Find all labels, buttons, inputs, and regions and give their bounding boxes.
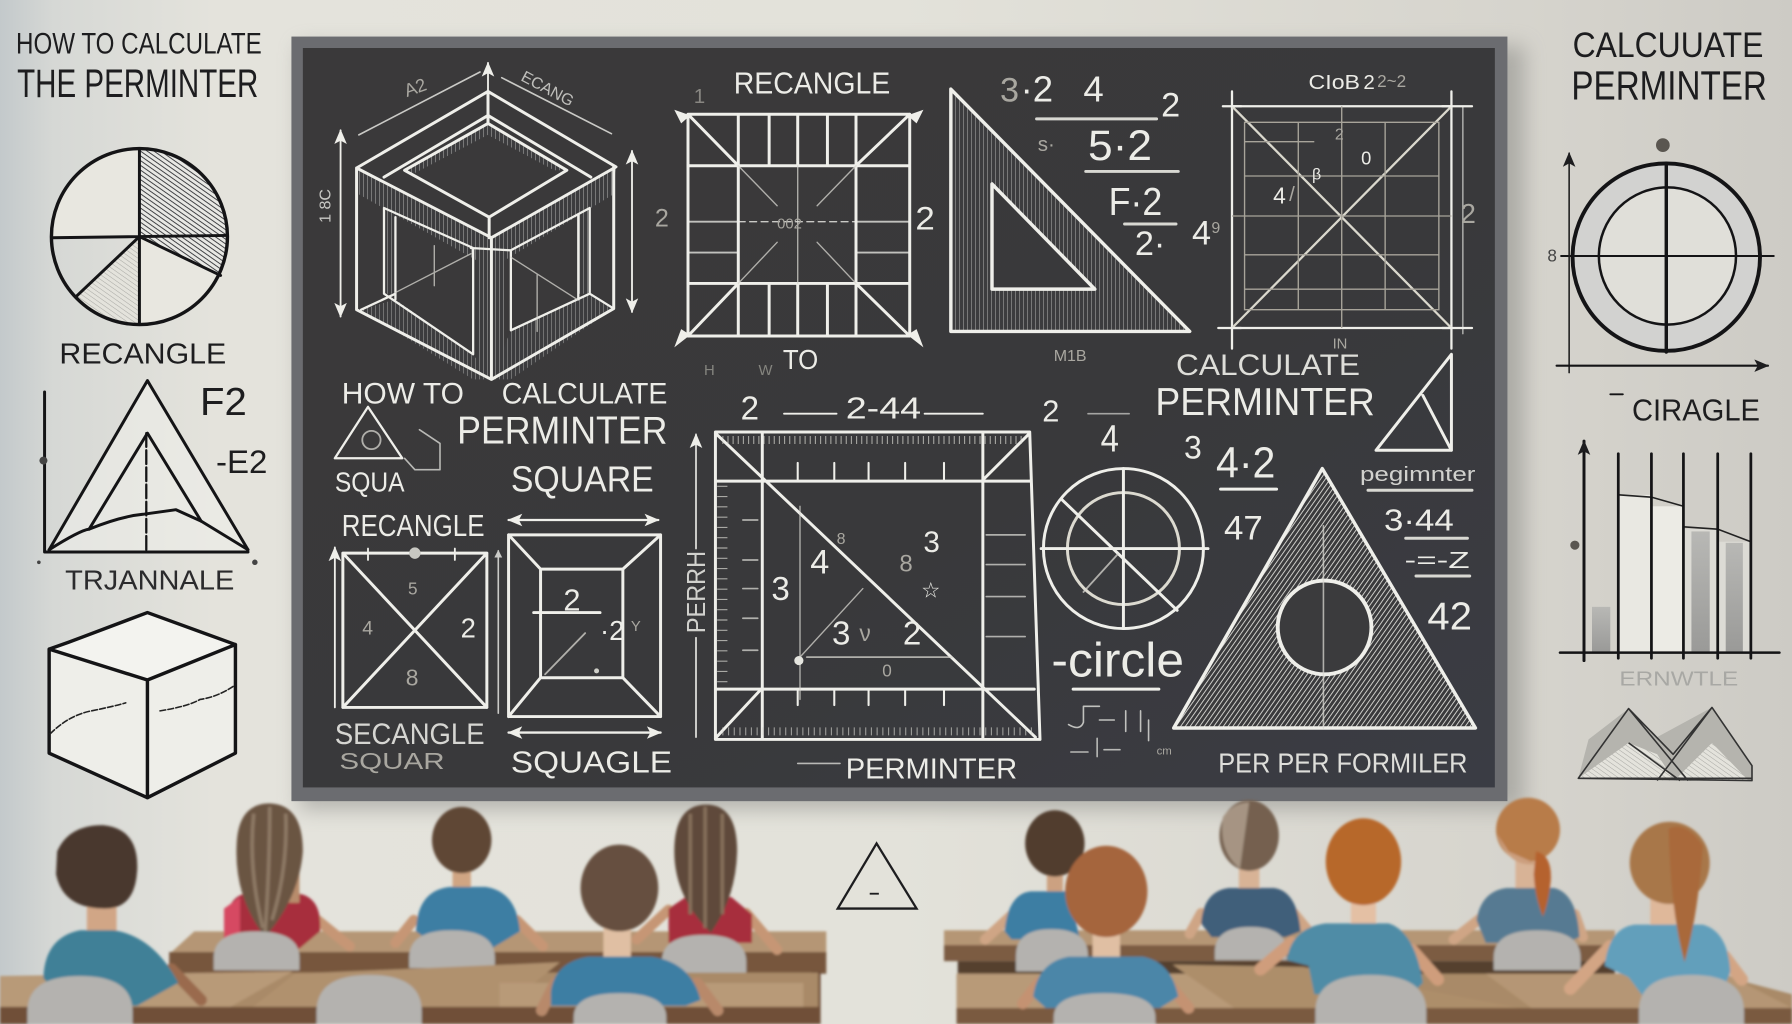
diagram: rectangle with grid: 1 bbox=[694, 85, 705, 108]
dimension numbers above rectangle: 4 bbox=[1101, 417, 1119, 459]
diagram: large ruled rectangle: 3 bbox=[923, 526, 940, 559]
chalk text: calculate perimeter left bbox=[342, 377, 667, 452]
diagram: square with diagonals: 2~2 bbox=[1377, 71, 1406, 91]
formula stack: fractions: 4 bbox=[1083, 69, 1104, 110]
student: grey-brown hair bbox=[1190, 800, 1309, 960]
dimension numbers above rectangle: 2-44 bbox=[846, 390, 921, 425]
diagram: hatched triangle with circle bbox=[1174, 469, 1475, 728]
dimension numbers above rectangle bbox=[741, 390, 1129, 459]
circle diagram on axes bbox=[1547, 138, 1774, 373]
chalk labels: bottom: PERMINTER bbox=[846, 753, 1017, 785]
chalkboard shadow bbox=[299, 46, 1525, 809]
bar chart bbox=[1560, 441, 1779, 661]
triangle sketch bbox=[37, 381, 267, 565]
student: dark hair teal shirt bbox=[27, 825, 201, 1024]
formula: perimeter stack bbox=[1360, 463, 1476, 639]
diagram: rectangle with grid bbox=[655, 66, 935, 347]
formula stack: fractions: F·2 bbox=[1109, 181, 1162, 224]
chalk text: calculate perimeter left: PERMINTER bbox=[457, 409, 667, 452]
chalk text: calculate perimeter left: HOW TO bbox=[342, 377, 464, 410]
triangle sketch: -E2 bbox=[216, 444, 267, 480]
formula: 4·2 over 47 bbox=[1184, 429, 1277, 547]
title: how to calculate the perimeter: THE PERMINTER bbox=[17, 62, 258, 106]
student: dark hair seated back bbox=[985, 810, 1088, 971]
formula: 4·2 over 47: 47 bbox=[1224, 509, 1263, 547]
diagram: crossed rectangle: 5 bbox=[408, 578, 418, 598]
diagram: large ruled rectangle: 3 bbox=[771, 571, 790, 608]
chalk text: how to: TO bbox=[783, 344, 818, 375]
diagram: nested square bbox=[509, 535, 661, 717]
chalk labels: secangle, squar, squagle bbox=[335, 718, 672, 780]
dimension numbers above rectangle: 2 bbox=[741, 390, 759, 427]
diagram: large ruled rectangle bbox=[681, 432, 1040, 739]
diagram: square with diagonals: β bbox=[1312, 166, 1321, 183]
diagram: nested square: 2 bbox=[563, 582, 581, 617]
formula stack: fractions: 4 bbox=[1192, 215, 1211, 253]
chalk labels: secangle, squar, squagle: SQUAR bbox=[339, 748, 445, 774]
triangle sketch: F2 bbox=[200, 381, 247, 424]
diagram: large ruled rectangle: 4 bbox=[810, 544, 829, 582]
diagram: square with diagonals: 2 bbox=[1461, 198, 1476, 229]
chalk text: how to: M1B bbox=[1054, 348, 1087, 365]
formula stack: fractions: 3 bbox=[1000, 72, 1019, 110]
diagram: nested square: Y bbox=[631, 619, 641, 635]
diagram: square with diagonals: 2 bbox=[1335, 126, 1344, 143]
chalk text: how to: H W bbox=[704, 363, 773, 379]
small triangle bbox=[1376, 354, 1451, 450]
formula stack: fractions bbox=[1000, 69, 1220, 263]
chalk text: calculate perimeter left: CALCULATE bbox=[502, 377, 667, 410]
panel: chalkboard bbox=[291, 37, 1507, 801]
diagram: rectangle with grid: 002 bbox=[777, 217, 802, 233]
chalk labels: secangle, squar, squagle: SQUAGLE bbox=[511, 745, 672, 780]
student: long hair red shirt right bbox=[637, 805, 777, 978]
title: how to calculate the perimeter: HOW TO CALCULATE bbox=[16, 28, 262, 61]
label: circle: -circle bbox=[1051, 635, 1184, 688]
icon: small triangle with tag bbox=[335, 407, 440, 470]
chalk labels: squa, square, recangle bbox=[335, 458, 654, 543]
chalk labels: squa, square, recangle: SQUA bbox=[335, 466, 405, 497]
front desks right group bbox=[957, 965, 1792, 1024]
formula stack: fractions: 5·2 bbox=[1088, 122, 1152, 169]
circle diagram on axes: 8 bbox=[1547, 246, 1557, 266]
scribbled formula bbox=[1069, 706, 1172, 757]
dimension arrows bbox=[317, 63, 632, 317]
student: center blue shirt bbox=[395, 807, 543, 968]
diagram: large ruled rectangle: 2 bbox=[903, 616, 921, 653]
diagram: square with diagonals bbox=[1218, 71, 1476, 353]
diagram: large ruled rectangle: 8 bbox=[899, 550, 913, 577]
classroom: right group of students bbox=[944, 798, 1792, 1024]
small triangle on wall bbox=[838, 843, 917, 909]
formula stack: fractions: 9 bbox=[1211, 220, 1220, 237]
hatched prisms sketch bbox=[1578, 707, 1752, 781]
student: orange hair bbox=[1261, 818, 1438, 1024]
formula stack: fractions: s· bbox=[1038, 133, 1055, 156]
formula stack: fractions: ·2 bbox=[1021, 69, 1053, 110]
diagram: square with diagonals: IN bbox=[1333, 337, 1347, 353]
diagram: square with diagonals: CIoB bbox=[1309, 71, 1360, 94]
diagram: crossed rectangle: 8 bbox=[406, 665, 418, 691]
diagram: set square triangle bbox=[951, 89, 1190, 331]
diagram: rectangle with grid: RECANGLE bbox=[734, 66, 890, 101]
diagram: large ruled rectangle: 0 bbox=[882, 661, 892, 681]
diagram: square with diagonals: 0 bbox=[1361, 148, 1371, 169]
label: ciragle: CIRAGLE bbox=[1632, 393, 1760, 428]
diagram: crossed rectangle bbox=[335, 547, 498, 713]
diagram: large ruled rectangle: PERRH bbox=[681, 551, 711, 633]
diagram: rectangle with grid: 2 bbox=[915, 201, 935, 237]
formula: 4·2 over 47: 3 bbox=[1184, 429, 1202, 465]
diagram: isometric cube bbox=[317, 63, 632, 379]
title: calculate perimeter: CALCUUATE bbox=[1573, 25, 1763, 65]
diagram: large ruled rectangle: 8 bbox=[837, 531, 846, 548]
cube sketch bbox=[49, 613, 235, 798]
label: ernwtle: ERNWTLE bbox=[1619, 668, 1738, 691]
diagram: rectangle with grid: 2 bbox=[655, 204, 669, 232]
chalk text: calculate perimeter right: PERMINTER bbox=[1155, 381, 1375, 424]
student: long ponytail bbox=[1570, 822, 1744, 1024]
label: recangle: RECANGLE bbox=[59, 338, 226, 370]
panel: left wall sketches bbox=[16, 28, 267, 798]
chalk text: calculate perimeter right bbox=[1155, 349, 1375, 424]
dimension numbers above rectangle: 2 bbox=[1042, 394, 1059, 429]
chalk labels: bottom bbox=[798, 748, 1467, 785]
dimension arrows: 1 8C bbox=[317, 189, 334, 223]
double arrow below square bbox=[509, 732, 661, 734]
student: long hair red shirt bbox=[214, 803, 350, 970]
back desk right bbox=[944, 930, 1615, 975]
formula: perimeter stack: -=-Z bbox=[1405, 547, 1470, 573]
formula stack: fractions: 2 bbox=[1161, 87, 1180, 125]
diagram: large ruled rectangle: ν bbox=[859, 620, 871, 646]
diagram: circle with sectors bbox=[1041, 469, 1208, 629]
panel: right wall sketches bbox=[1547, 25, 1779, 781]
dimension arrows: ECANG bbox=[518, 69, 576, 110]
chalk labels: bottom: PER PER FORMILER bbox=[1218, 748, 1467, 779]
diagram: square with diagonals: 2 bbox=[1363, 71, 1375, 94]
diagram: crossed rectangle: 2 bbox=[461, 613, 476, 644]
scribbled formula: cm bbox=[1157, 745, 1172, 757]
diagram: large ruled rectangle: 3 bbox=[832, 616, 850, 653]
chair: front center bbox=[317, 975, 422, 1024]
student: brown hair center front bbox=[542, 845, 718, 1024]
student: auburn hair front bbox=[1023, 846, 1189, 1024]
chalk labels: squa, square, recangle: RECANGLE bbox=[342, 508, 485, 543]
student: ponytail braid bbox=[1454, 798, 1583, 970]
diagram: square with diagonals: 4 bbox=[1273, 182, 1286, 208]
diagram: crossed rectangle: 4 bbox=[362, 617, 373, 639]
diagram: nested square: ·2 bbox=[600, 615, 624, 646]
formula: 4·2 over 47: 4·2 bbox=[1216, 440, 1275, 488]
title: how to calculate the perimeter bbox=[16, 28, 262, 106]
diagram: square with diagonals: / bbox=[1289, 183, 1295, 206]
formula: perimeter stack: pegimnter bbox=[1360, 463, 1476, 486]
chalk text: calculate perimeter right: CALCULATE bbox=[1176, 349, 1360, 382]
classroom: left group of students bbox=[0, 803, 826, 1024]
back desk left bbox=[169, 931, 826, 1024]
double arrow above square bbox=[509, 519, 658, 521]
chalk text: how to bbox=[704, 344, 1087, 379]
dimension arrows: A2 bbox=[401, 74, 429, 101]
diagram: large ruled rectangle: ☆ bbox=[921, 578, 941, 603]
formula: perimeter stack: 42 bbox=[1427, 596, 1472, 639]
chalk labels: squa, square, recangle: SQUARE bbox=[511, 458, 654, 499]
pie chart icon bbox=[51, 149, 227, 325]
formula: perimeter stack: 3·44 bbox=[1384, 502, 1454, 537]
front desk left group bbox=[0, 962, 818, 1024]
chalk labels: secangle, squar, squagle: SECANGLE bbox=[335, 718, 485, 751]
formula stack: fractions: 2· bbox=[1135, 225, 1165, 263]
title: calculate perimeter bbox=[1571, 25, 1767, 108]
label: trjannale: TRJANNALE bbox=[65, 565, 234, 596]
